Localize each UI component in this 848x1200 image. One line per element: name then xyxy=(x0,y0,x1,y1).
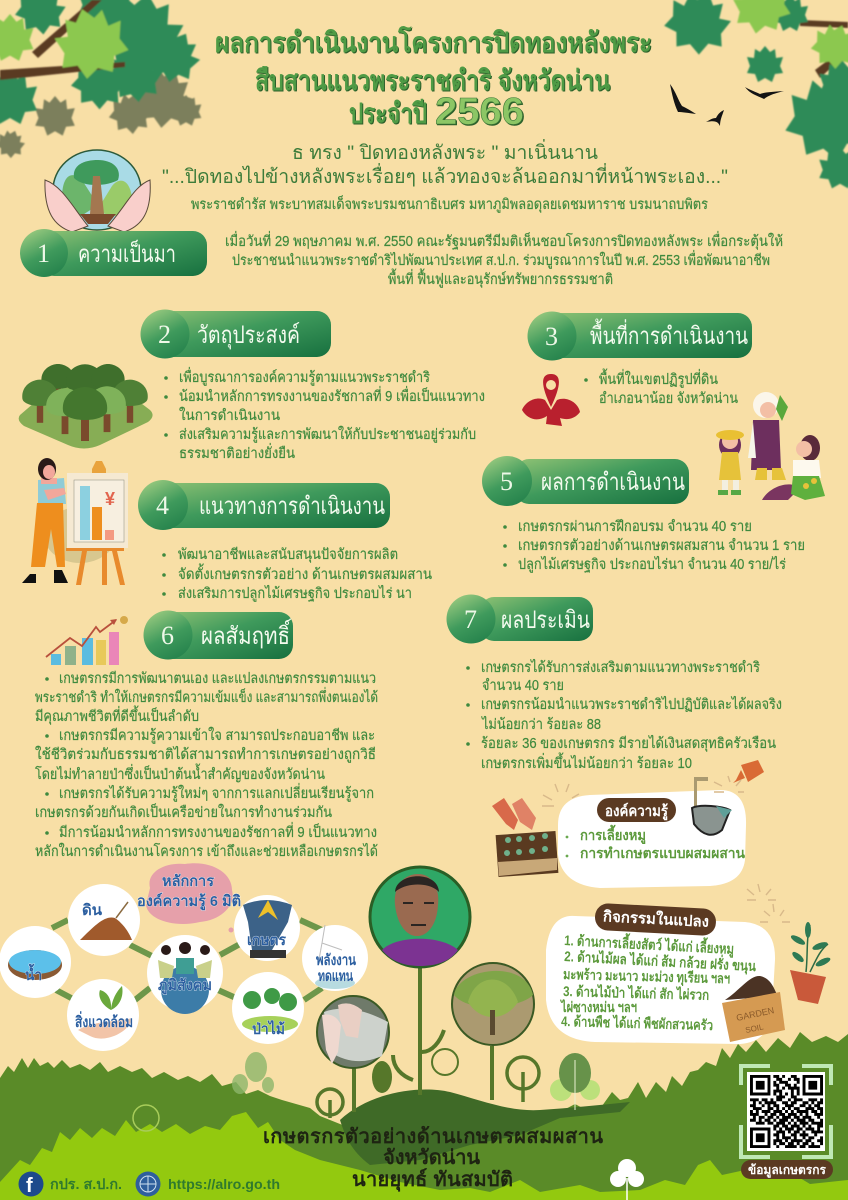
node: social geography: ภูมิสังคม xyxy=(158,976,212,995)
panel: knowledge: การเลี้ยงหมู xyxy=(580,824,646,844)
section 6: pill heading xyxy=(144,610,293,660)
quote: ธ ทรง " ปิดทองหลังพระ " มาเนิ่นนาน xyxy=(292,139,598,164)
foliage: top left xyxy=(0,0,208,161)
label: farmer data xyxy=(741,1160,833,1179)
section 4: bullets: พัฒนาอาชีพและสนับสนุนปัจจัยการผลิต xyxy=(178,546,398,563)
icon: garden soil bag: GARDEN xyxy=(735,1005,775,1023)
section 7: bullets: เกษตรกรน้อมนำแนวพระราชดำริไปปฏิบัติและได้ผลจริง xyxy=(481,695,782,713)
section 6: paragraphs: เกษตรกรมีการพัฒนาตนเอง และแปลงเกษตรกรรมตามแนว xyxy=(59,670,376,687)
icon: growth chart xyxy=(46,616,128,665)
title: ผลการดำเนินงานโครงการปิดทองหลังพระ xyxy=(215,25,652,58)
node: soil: ดิน xyxy=(82,901,103,919)
icon: watering can xyxy=(733,760,764,783)
section 7: pill heading xyxy=(446,594,593,644)
section 7: bullets: จำนวน 40 ราย xyxy=(482,678,564,694)
section 7: pill heading: 7 xyxy=(464,605,477,634)
icon: map pin xyxy=(522,374,580,426)
node: environment: สิ่งแวดล้อม xyxy=(75,1011,133,1031)
icon: forest xyxy=(19,364,153,448)
section 3: bullets xyxy=(584,368,738,407)
section 6: pill heading: 6 xyxy=(161,621,174,650)
section 4: pill heading: 4 xyxy=(156,491,169,520)
QR code xyxy=(741,1066,831,1157)
icon: gloves and seed tray xyxy=(492,798,558,877)
section 7: pill heading: ผลประเมิน xyxy=(501,607,590,634)
section 6: paragraphs xyxy=(35,670,378,860)
section 7: bullets: ไม่น้อยกว่า ร้อยละ 88 xyxy=(481,715,601,733)
node: renewable energy xyxy=(302,925,368,991)
icon: potted plant xyxy=(790,922,832,1004)
section 2: pill heading: 2 xyxy=(158,320,171,349)
caption: model farmer: นายยุทธ์ ทันสมบัติ xyxy=(352,1168,513,1192)
panel: activities in the plot: ไผ่ซางหม่น ฯลฯ xyxy=(559,998,637,1015)
section 2: pill heading: วัตถุประสงค์ xyxy=(197,321,300,350)
section 1: text: ประชาชนนำแนวพระราชดำริไปพัฒนาประเทศ ส.ป.ก. ร่วมบูรณาการในปี พ.ศ. 2553 เพื่อพัฒนาอาชีพ xyxy=(232,250,770,269)
quote: "...ปิดทองไปข้างหลังพระเรื่อยๆ แล้วทองจะล้นออกมาที่หน้าพระเอง..." xyxy=(162,163,728,188)
title xyxy=(215,25,652,133)
panel: activities in the plot: 2. ด้านไม้ผล ได้แก่ ส้ม กล้วย ฝรั่ง ขนุน xyxy=(564,946,757,975)
infographic: six dimensions of knowledge xyxy=(0,863,368,1051)
section 6: pill heading: ผลสัมฤทธิ์ xyxy=(201,618,292,650)
icon: sparkles xyxy=(542,776,790,922)
icon: logo xyxy=(45,150,150,232)
section 6: paragraphs: ใช้ชีวิตร่วมกับธรรมชาติได้สามารถทำการเกษตรอย่างถูกวิธี xyxy=(35,745,376,763)
title: 2566 xyxy=(435,91,524,133)
callout: six dimensions cloud xyxy=(137,863,241,932)
section 4: bullets: ส่งเสริมการปลูกไม้เศรษฐกิจ ประกอบไร่ นา xyxy=(178,584,412,602)
section 5: pill heading: ผลการดำเนินงาน xyxy=(541,469,685,496)
node: renewable energy: พลังงาน xyxy=(316,952,357,969)
caption: model farmer: จังหวัดน่าน xyxy=(383,1147,480,1169)
section 3: pill heading: 3 xyxy=(545,322,558,351)
section 7: bullets: เกษตรกรเพิ่มขึ้นไม่น้อยกว่า ร้อยละ 10 xyxy=(481,752,692,772)
panel: activities in the plot: กิจกรรมในแปลง xyxy=(603,907,709,931)
caption: model farmer xyxy=(263,1125,603,1192)
icon: woman with chart xyxy=(22,458,128,585)
label: farmer data: ข้อมูลเกษตรกร xyxy=(748,1163,826,1178)
foliage: top right xyxy=(659,0,848,188)
section 5: pill heading xyxy=(482,456,689,506)
node: water: น้ำ xyxy=(25,963,42,984)
section 3: pill heading xyxy=(528,312,752,360)
section 2: bullets: ธรรมชาติอย่างยั่งยืน xyxy=(179,443,295,462)
section 2: bullets: ในการดำเนินงาน xyxy=(179,406,280,424)
node: renewable energy: ทดแทน xyxy=(318,968,354,985)
section 2: bullets: ส่งเสริมความรู้และการพัฒนาให้กับประชาชนอยู่ร่วมกับ xyxy=(179,425,476,443)
icon: bucket and tap xyxy=(692,777,732,835)
panel: activities in the plot: 4. ด้านพืช ได้แก่ พืชผักสวนครัว xyxy=(561,1012,713,1033)
section 1: text: เมื่อวันที่ 29 พฤษภาคม พ.ศ. 2550 คณะรัฐมนตรีมีมติเห็นชอบโครงการปิดทองหลังพระ เพื่อกระตุ้นให้ xyxy=(225,231,783,250)
section 2: pill heading xyxy=(140,310,331,358)
section 3: bullets: อำเภอนาน้อย จังหวัดน่าน xyxy=(599,390,738,407)
node: agriculture: เกษตร xyxy=(247,932,287,949)
section 6: paragraphs: เกษตรกรได้รับความรู้ใหม่ๆ จากการแลกเปลี่ยนเรียนรู้จาก xyxy=(59,783,374,802)
node: social geography xyxy=(147,935,223,1014)
photo: pigs xyxy=(317,996,389,1068)
node: agriculture xyxy=(234,895,300,961)
section 6: paragraphs: หลักในการดำเนินงานโครงการ เข้าถึงและช่วยเหลือเกษตรกรได้ xyxy=(35,842,378,860)
section 5: bullets: ปลูกไม้เศรษฐกิจ ประกอบไร่นา จำนวน 40 ราย/ไร่ xyxy=(518,555,786,573)
section 5: pill heading: 5 xyxy=(500,467,513,496)
ground: grass xyxy=(0,1032,848,1200)
section 2: bullets: น้อมนำหลักการทรงงานของรัชกาลที่ 9 เพื่อเป็นแนวทาง xyxy=(179,386,485,405)
panel: knowledge: องค์ความรู้ xyxy=(605,802,669,821)
footer: website: https://alro.go.th xyxy=(168,1176,280,1192)
footer: facebook xyxy=(18,1172,122,1197)
icon: woman with chart: ¥ xyxy=(105,489,115,509)
node: water xyxy=(0,926,71,998)
section 6: paragraphs: เกษตรกรมีความรู้ความเข้าใจ สามารถประกอบอาชีพ และ xyxy=(59,726,375,744)
section 2: bullets: เพื่อบูรณาการองค์ความรู้ตามแนวพระราชดำริ xyxy=(179,367,430,386)
photo: tree garden xyxy=(452,963,534,1045)
section 3: bullets: พื้นที่ในเขตปฏิรูปที่ดิน xyxy=(599,368,718,388)
decorative trees xyxy=(133,967,644,1200)
section 6: paragraphs: โดยไม่ทำลายป่าซึ่งเป็นป่าต้นน้ำสำคัญของจังหวัดน่าน xyxy=(35,763,325,783)
section 6: paragraphs: เกษตรกรด้วยกันเกิดเป็นเครือข่ายในการทำงานร่วมกัน xyxy=(35,802,332,821)
section 4: bullets: จัดตั้งเกษตรกรตัวอย่าง ด้านเกษตรผสมผสาน xyxy=(178,563,432,583)
section 1: pill heading xyxy=(20,229,207,277)
node: soil xyxy=(68,884,140,956)
section 3: pill heading: พื้นที่การดำเนินงาน xyxy=(590,318,748,350)
icon: garden soil bag xyxy=(722,976,785,1042)
section 5: bullets xyxy=(503,519,805,573)
caption: model farmer: เกษตรกรตัวอย่างด้านเกษตรผสมผสาน xyxy=(263,1125,603,1148)
node: forestry: ป่าไม้ xyxy=(252,1019,285,1038)
footer: website xyxy=(136,1172,280,1196)
icon: birds xyxy=(670,84,784,126)
panel: activities in the plot: 3. ด้านไม้ป่า ได้แก่ สัก ไผ่รวก xyxy=(563,982,709,1003)
quote xyxy=(162,139,728,213)
quote: พระราชดำรัส พระบาทสมเด็จพระบรมชนกาธิเบศร มหาภูมิพลอดุลยเดชมหาราช บรมนาถบพิตร xyxy=(191,194,708,213)
panel: activities in the plot: 1. ด้านการเลี้ยงสัตว์ ได้แก่ เลี้ยงหมู xyxy=(564,929,735,958)
panel: knowledge: การทำเกษตรแบบผสมผสาน xyxy=(580,845,745,861)
footer: facebook: กปร. ส.ป.ก. xyxy=(50,1176,122,1192)
node: environment xyxy=(67,979,139,1051)
section 7: bullets: เกษตรกรได้รับการส่งเสริมตามแนวทางพระราชดำริ xyxy=(481,658,760,676)
panel: activities in the plot xyxy=(546,903,775,1044)
section 7: bullets xyxy=(466,658,782,772)
section 6: paragraphs: มีคุณภาพชีวิตที่ดีขึ้นเป็นลำดับ xyxy=(35,705,199,725)
section 1: pill heading: 1 xyxy=(37,239,50,268)
footer: facebook: f xyxy=(26,1175,33,1197)
section 1: text: พื้นที่ ฟื้นฟูและอนุรักษ์ทรัพยากรธรรมชาติ xyxy=(388,268,613,288)
section 4: bullets xyxy=(162,546,432,602)
section 6: paragraphs: มีการน้อมนำหลักการทรงงานของรัชกาลที่ 9 เป็นแนวทาง xyxy=(59,822,377,841)
section 2: bullets xyxy=(164,367,485,462)
section 7: bullets: ร้อยละ 36 ของเกษตรกร มีรายได้เงินสดสุทธิครัวเรือน xyxy=(481,734,776,752)
callout: six dimensions cloud: หลักการ xyxy=(162,873,215,890)
section 5: bullets: เกษตรกรตัวอย่างด้านเกษตรผสมสาน จำนวน 1 ราย xyxy=(518,537,805,554)
section 5: bullets: เกษตรกรผ่านการฝึกอบรม จำนวน 40 ราย xyxy=(518,519,752,535)
photo: farmer portrait xyxy=(370,867,470,967)
title: สืบสานแนวพระราชดำริ จังหวัดน่าน xyxy=(255,65,610,96)
section 1: pill heading: ความเป็นมา xyxy=(78,239,176,268)
icon: garden soil bag: SOIL xyxy=(745,1022,765,1035)
panel: knowledge xyxy=(558,790,746,888)
section 4: pill heading: แนวทางการดำเนินงาน xyxy=(199,493,385,520)
section 1: text xyxy=(225,231,783,288)
section 6: paragraphs: พระราชดำริ ทำให้เกษตรกรมีความเข้มแข็ง และสามารถพึ่งตนเองได้ xyxy=(35,687,378,706)
title: ประจำปี xyxy=(349,98,427,129)
panel: activities in the plot: มะพร้าว มะนาว มะม่วง ทุเรียน ฯลฯ xyxy=(563,966,730,987)
section 4: pill heading xyxy=(138,480,390,530)
node: forestry xyxy=(232,972,304,1044)
callout: six dimensions cloud: องค์ความรู้ 6 มิติ xyxy=(137,892,241,911)
icon: family gardening xyxy=(716,392,825,500)
